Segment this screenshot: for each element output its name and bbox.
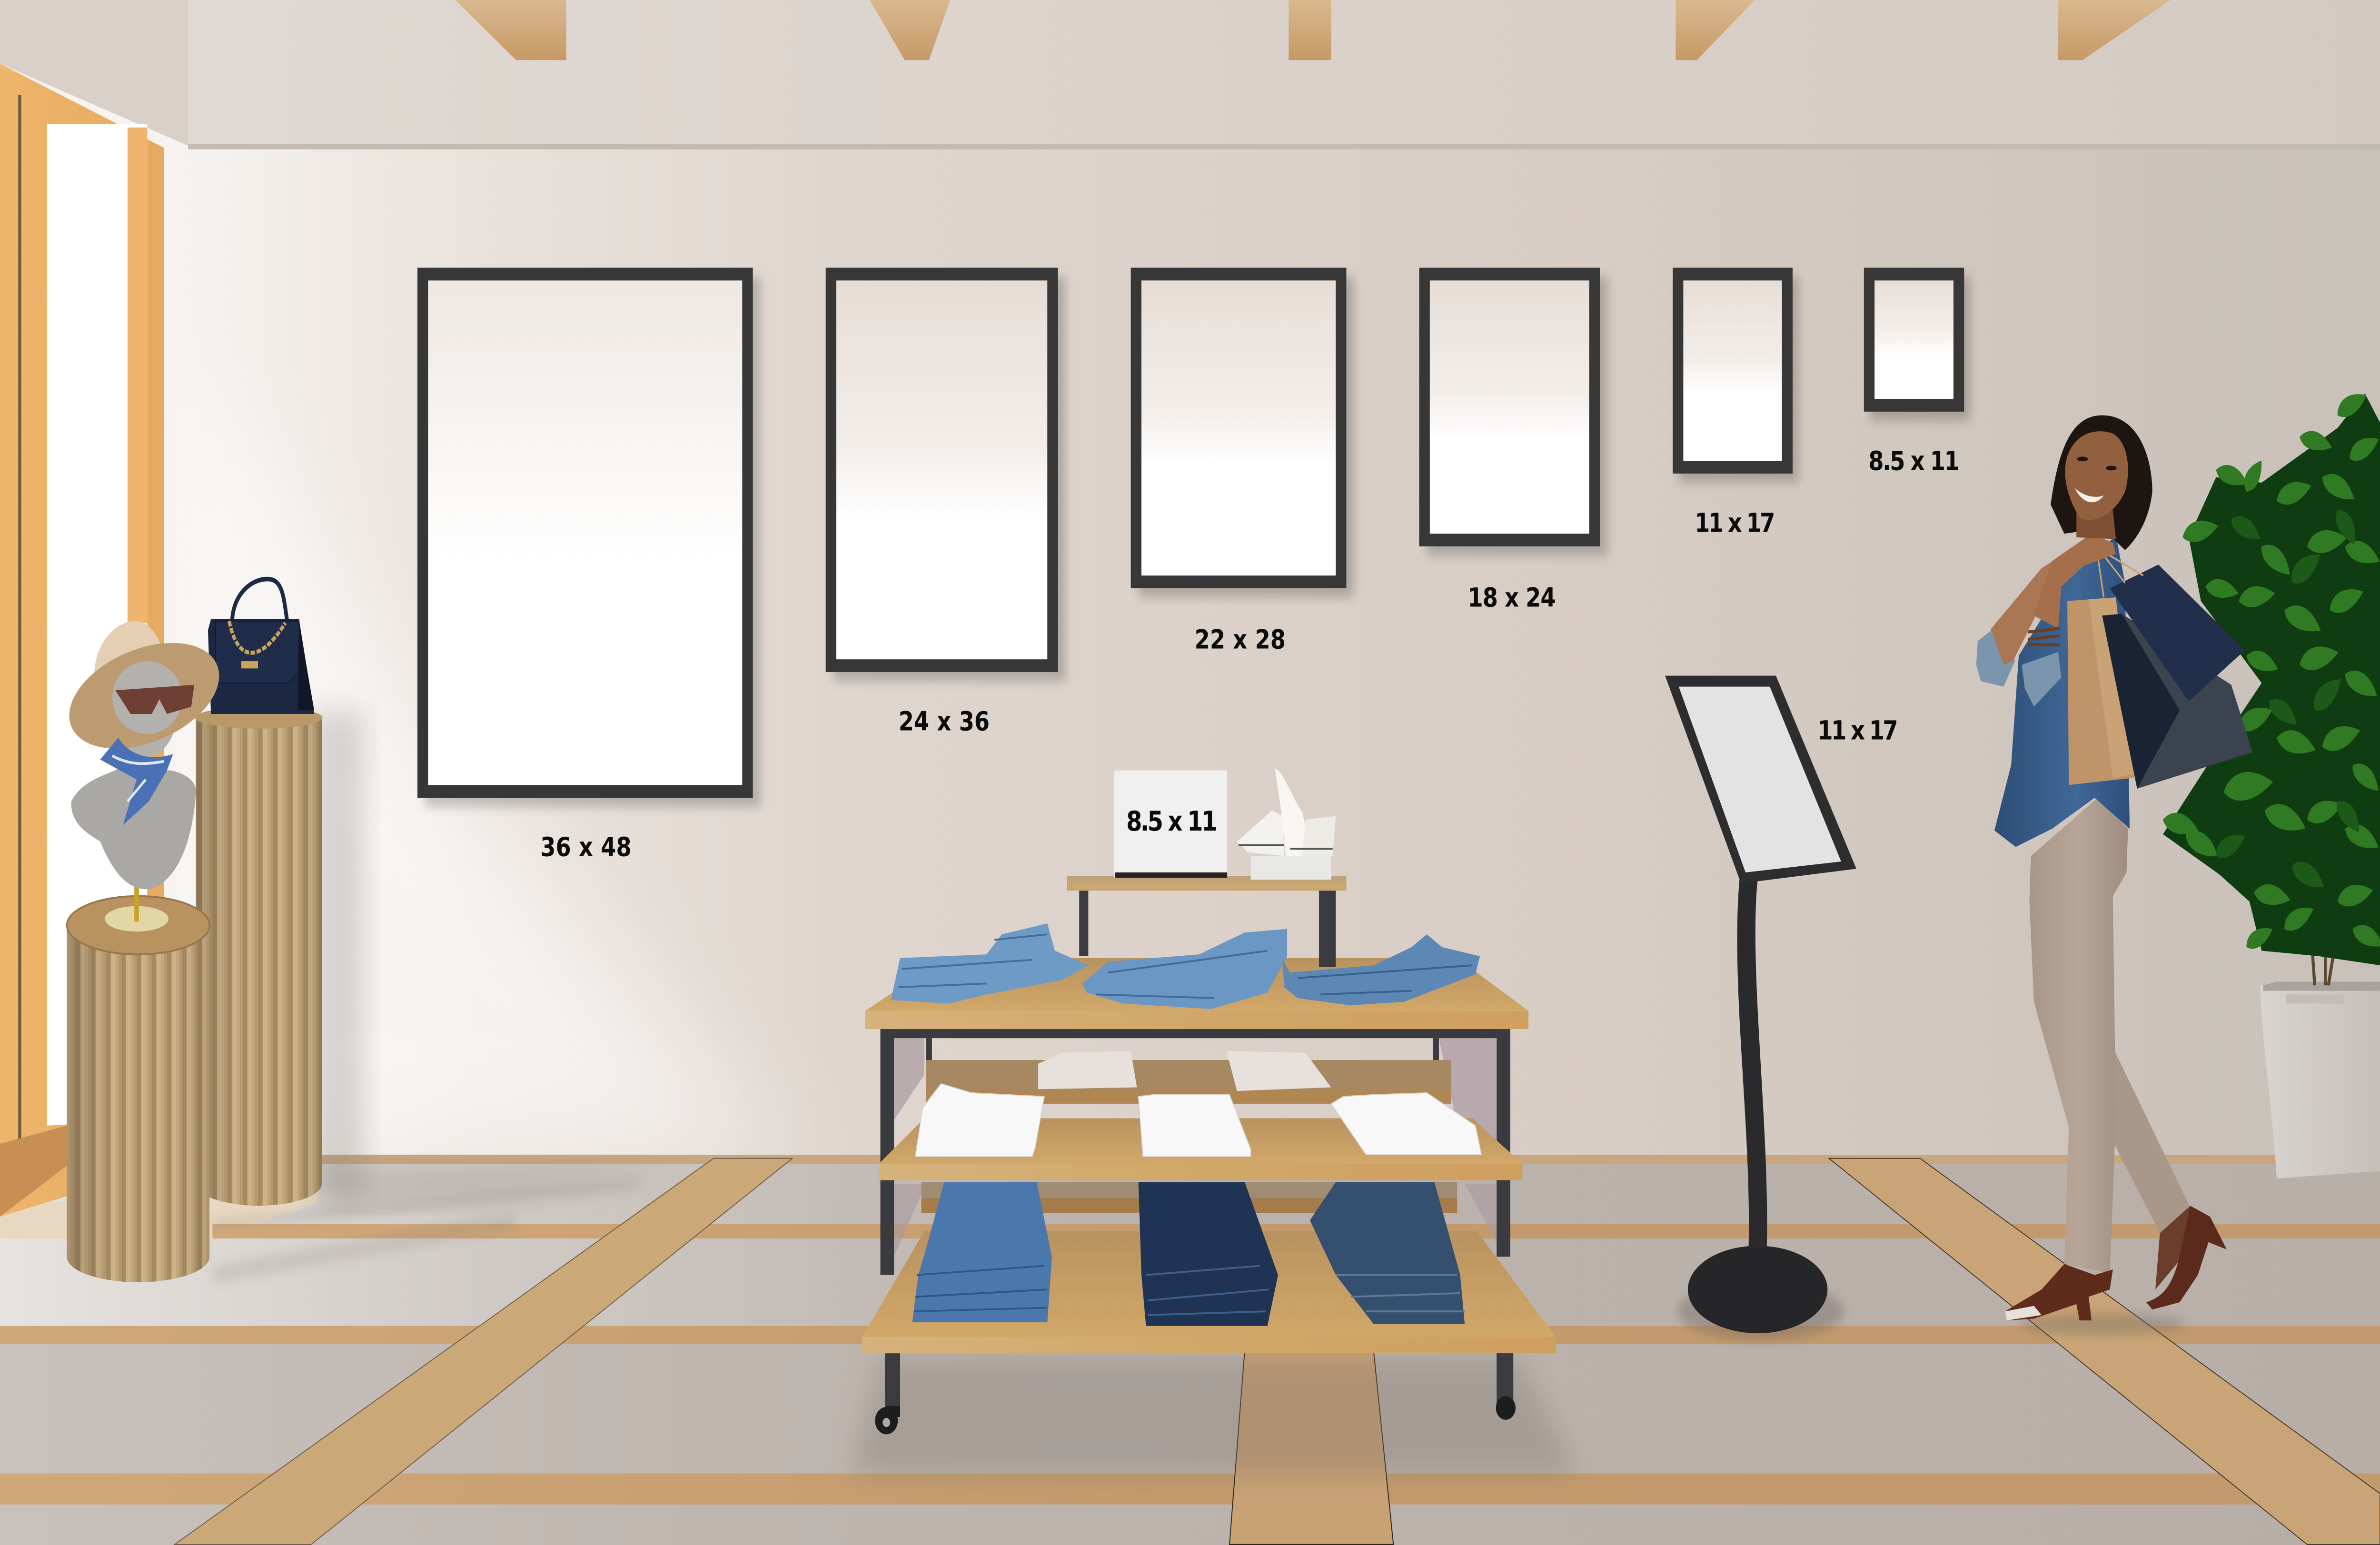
t-shirts back row xyxy=(1038,1051,1331,1091)
label: 8.5 x 11 table: 8.5 x 11 xyxy=(1126,806,1217,837)
neck xyxy=(2076,510,2116,539)
riser supports xyxy=(1079,891,1336,967)
riser shelf xyxy=(1067,876,1346,891)
back shelf lower xyxy=(922,1182,1457,1213)
label: 8.5 x 11 wall: 8.5 x 11 xyxy=(1868,446,1960,476)
poster frame: 11 x 17 xyxy=(1678,274,1799,483)
face xyxy=(2065,431,2128,520)
bottom shelf xyxy=(862,1231,1556,1353)
hair back xyxy=(2051,415,2152,550)
floor-standing sign holder xyxy=(1665,676,1856,1340)
rolled cuff xyxy=(2022,652,2061,707)
acrylic sign 8.5 x 11 xyxy=(1114,771,1227,878)
denim on tabletop left xyxy=(891,923,1088,1003)
ceiling beams xyxy=(456,0,2171,60)
middle shelf xyxy=(879,1119,1522,1180)
window xyxy=(0,64,176,1217)
wall xyxy=(0,0,2380,1166)
ceiling soffit xyxy=(0,0,2380,149)
woman with shopping bags xyxy=(1976,415,2252,1335)
poster frame: 8.5 x 11 xyxy=(1869,274,1970,421)
back cardboard pedestal xyxy=(195,707,683,1206)
poster frame: 24 x 36 xyxy=(831,274,1066,681)
table legs xyxy=(880,1029,1513,1408)
denim jacket xyxy=(1994,535,2130,847)
back foot and shoe xyxy=(2146,1206,2227,1309)
front shoe xyxy=(2005,1264,2113,1320)
label: 18 x 24: 18 x 24 xyxy=(1468,583,1556,613)
label: 11 x 17 stand: 11 x 17 xyxy=(1818,716,1898,746)
floor xyxy=(0,1155,2380,1545)
main tabletop xyxy=(865,958,1528,1038)
left arm xyxy=(1976,539,2102,681)
caster right xyxy=(1496,1396,1516,1420)
poster frame: 22 x 28 xyxy=(1136,274,1354,597)
floor shadow xyxy=(2019,1313,2186,1335)
back leg xyxy=(2087,1047,2190,1233)
plant xyxy=(2161,386,2380,985)
label: 36 x 48: 36 x 48 xyxy=(540,832,632,863)
shopping bags xyxy=(2067,550,2252,789)
denim on tabletop right xyxy=(1283,934,1480,1005)
sleeve cuff xyxy=(1976,630,2016,687)
label: 22 x 28: 22 x 28 xyxy=(1195,624,1286,655)
front cardboard pedestal xyxy=(67,896,209,1282)
bracelets xyxy=(2028,628,2060,645)
poster frame: 36 x 48 xyxy=(423,274,761,807)
t-shirts front row xyxy=(915,1084,1481,1157)
display table xyxy=(862,769,1556,1434)
forearm and hands xyxy=(2034,534,2116,628)
wall light patch xyxy=(182,364,789,1166)
front leg and hip xyxy=(2029,798,2128,1273)
folded jeans stacks xyxy=(912,1182,1465,1326)
table floor shadow xyxy=(850,1357,1578,1476)
denim on tabletop centre xyxy=(1082,929,1287,1009)
label: 11 x 17 wall: 11 x 17 xyxy=(1695,508,1775,538)
back shelf upper xyxy=(926,1060,1451,1104)
handbag xyxy=(208,579,314,714)
pot xyxy=(2260,982,2380,1179)
smile xyxy=(2075,488,2104,502)
side panels xyxy=(894,1038,924,1120)
caster left xyxy=(875,1406,900,1434)
eyes xyxy=(2077,456,2117,470)
poster frame: 18 x 24 xyxy=(1425,274,1607,555)
mannequin bust with hat xyxy=(59,621,230,931)
label: 24 x 36: 24 x 36 xyxy=(899,706,990,737)
sneakers xyxy=(1237,769,1336,880)
